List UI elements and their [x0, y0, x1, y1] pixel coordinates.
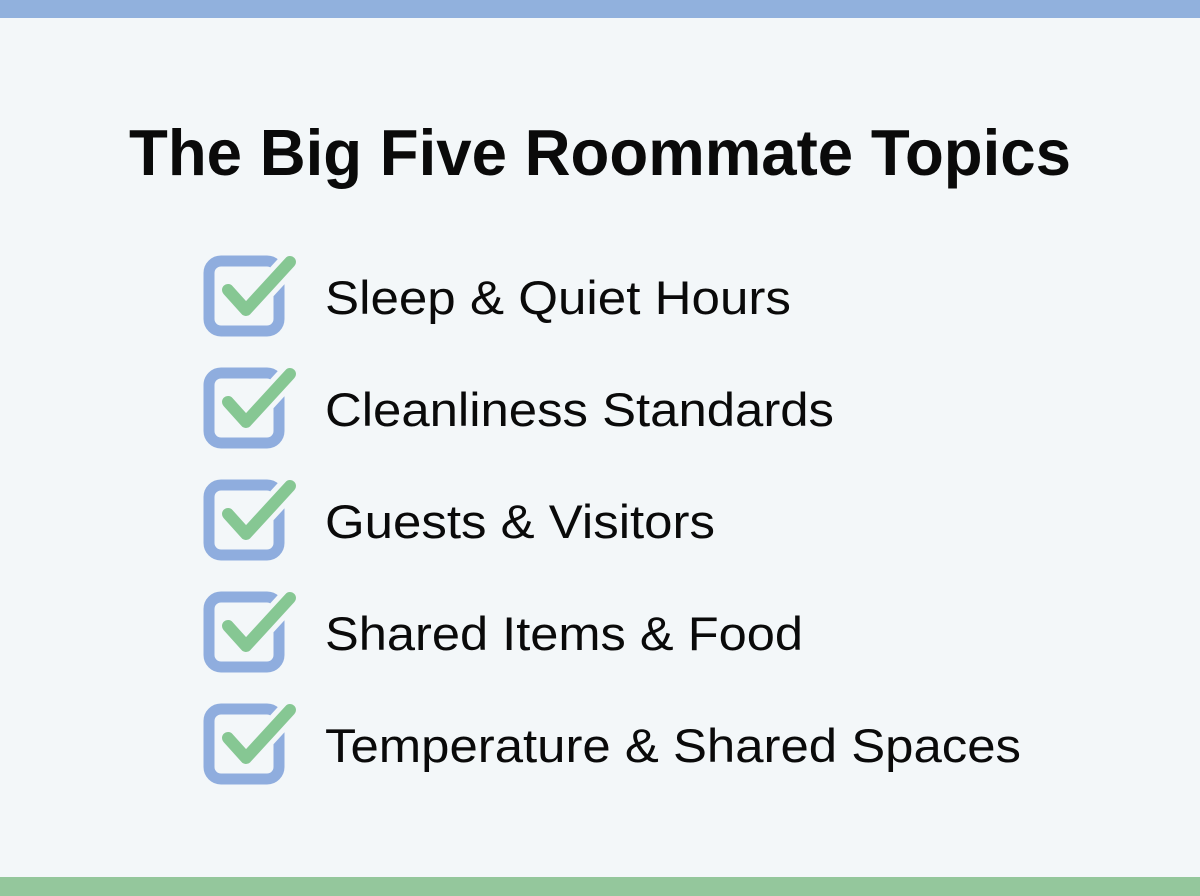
- item: sleep: Sleep & Quiet Hours: [325, 271, 791, 324]
- item: cleanliness: Cleanliness Standards: [325, 383, 834, 436]
- item: temperature: Temperature & Shared Spaces: [325, 719, 1021, 772]
- item: cleanliness: [209, 373, 834, 443]
- checklist: [209, 261, 1021, 779]
- item: sleep: [209, 261, 791, 331]
- item: shared items: Shared Items & Food: [325, 607, 803, 660]
- item: temperature: [209, 709, 1021, 779]
- top bar: [0, 0, 1200, 18]
- item: shared items: [209, 597, 803, 667]
- item: guests: Guests & Visitors: [325, 495, 715, 548]
- title: The Big Five Roommate Topics: [129, 116, 1071, 189]
- item: guests: [209, 485, 715, 555]
- bottom bar: [0, 877, 1200, 896]
